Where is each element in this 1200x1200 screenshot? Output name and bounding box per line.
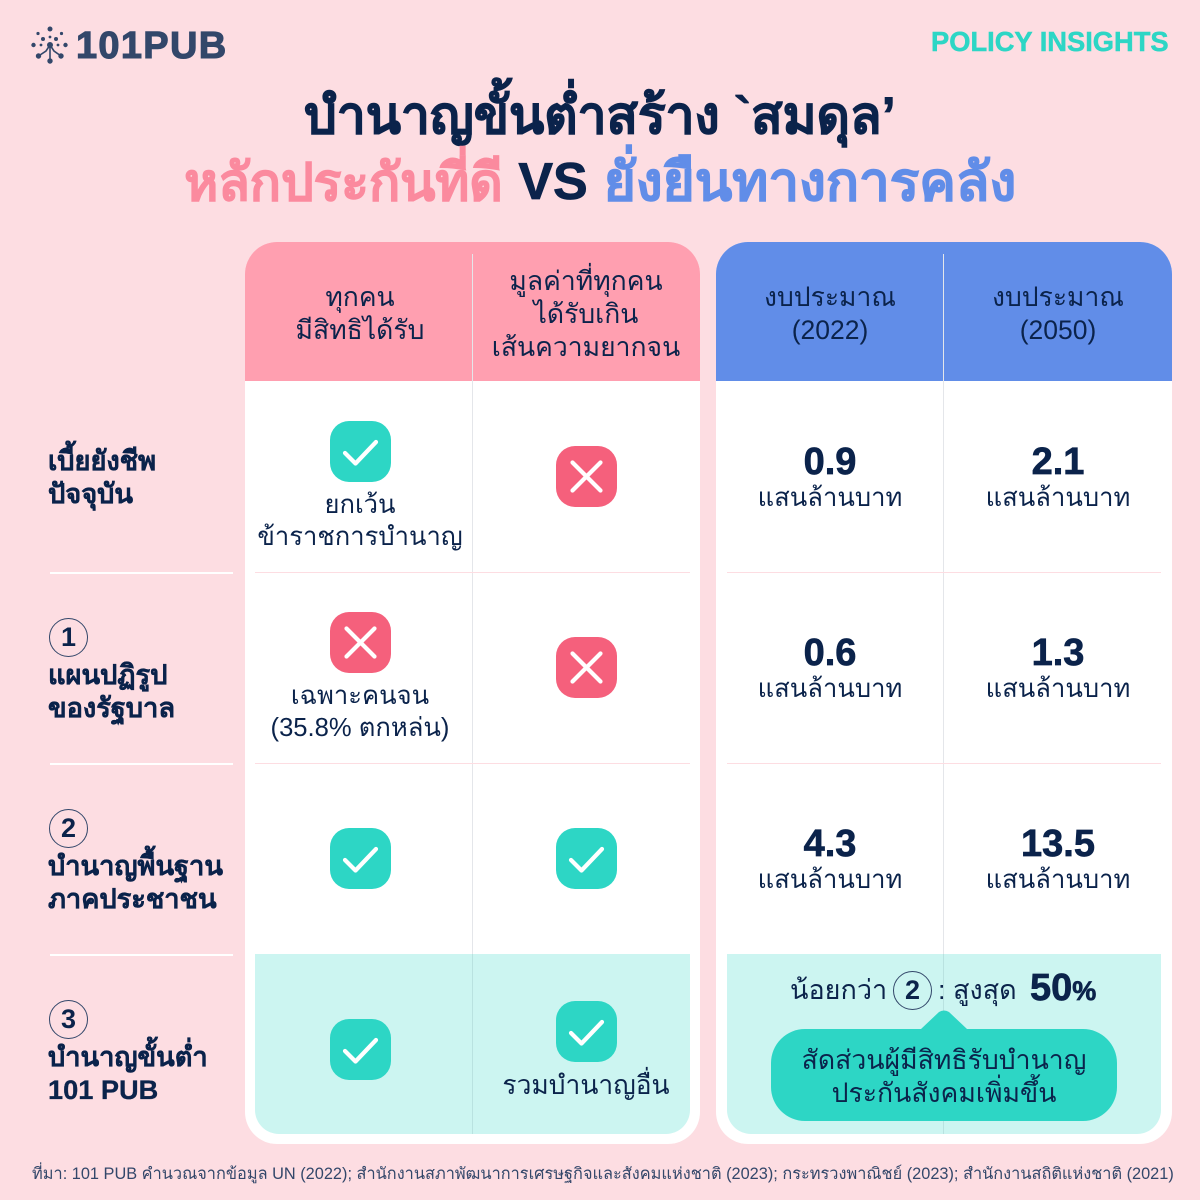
row label: 2 universal basic pension [48, 809, 223, 914]
icon: check row 2 [330, 828, 391, 889]
text: less than 2, up to 50% [790, 967, 1096, 1010]
title: VS [518, 153, 588, 211]
value: plan 1 2022: แสนล้านบาท [758, 675, 902, 703]
text: except civil servants: ข้าราชการบำนาญ [257, 523, 463, 551]
callout: share of social insurance pension recipients rises: ประกันสังคมเพิ่มขึ้น [832, 1078, 1056, 1108]
text: includes other pensions: รวมบำนาญอื่น [502, 1070, 670, 1100]
row label: 2 universal basic pension: 2 [61, 813, 76, 843]
icon: check row 0 [330, 421, 391, 482]
text: less than 2, up to 50%: 50% [1030, 967, 1096, 1009]
header: everyone eligible: มีสิทธิได้รับ [296, 315, 424, 345]
row label: 1 government plan: ของรัฐบาล [48, 692, 175, 723]
row label: 2 universal basic pension: ภาคประชาชน [48, 883, 217, 914]
header: budget 2050: (2050) [1020, 315, 1096, 345]
icon: cross row 0 [556, 446, 617, 507]
label: policy insights: POLICY INSIGHTS [931, 26, 1169, 57]
icon: cross row 1 [330, 612, 391, 673]
value: current 2050 [986, 441, 1130, 512]
value: plan 1 2022: 0.6 [804, 632, 856, 674]
callout: share of social insurance pension recipients rises [771, 1010, 1117, 1121]
value: plan 2 2022 [758, 823, 902, 894]
title: ยั่งยืนทางการคลัง [603, 153, 1016, 212]
value: plan 1 2050: 1.3 [1032, 632, 1084, 674]
text: except civil servants: ยกเว้น [324, 491, 396, 519]
value: plan 1 2022 [758, 632, 902, 703]
source note: ที่มา: 101 PUB คำนวณจากข้อมูล UN (2022); สำนักงานสภาพัฒนาการเศรษฐกิจและสังคมแห่งชาติ (2023); กระทรวงพาณิชย์ (2023); สำนักงานสถิติแห่งชาติ (2021) [32, 1165, 1174, 1183]
title: หลักประกันที่ดี [184, 153, 503, 211]
row label: current allowance: เบี้ยยังชีพ [48, 445, 156, 476]
row label: 3 minimum pension 101 PUB: 3 [61, 1004, 76, 1034]
row label: 3 minimum pension 101 PUB [48, 1000, 208, 1105]
text: poor only: (35.8% ตกหล่น) [271, 714, 449, 742]
text: except civil servants [257, 491, 463, 551]
value: current 2050: 2.1 [1032, 441, 1084, 483]
logo: 101PUB: 101PUB [76, 25, 227, 67]
row label: current allowance [48, 440, 156, 511]
value: plan 2 2050: 13.5 [1021, 823, 1095, 865]
row label: 3 minimum pension 101 PUB: บำนาญขั้นต่ำ [48, 1041, 208, 1072]
header: everyone eligible: ทุกคน [325, 282, 395, 312]
icon: check row 3 col 2 [556, 1001, 617, 1062]
text: poor only [271, 682, 449, 742]
panel: budget [716, 242, 1172, 1144]
title: บำนาญขั้นต่ำสร้าง `สมดุล’ [304, 86, 896, 144]
value: current 2022 [758, 441, 902, 512]
row label: 2 universal basic pension: บำนาญพื้นฐาน [48, 850, 223, 881]
value: current 2050: แสนล้านบาท [986, 484, 1130, 512]
header: everyone eligible [296, 282, 424, 345]
value: plan 2 2050: แสนล้านบาท [986, 866, 1130, 894]
text: poor only: เฉพาะคนจน [291, 682, 429, 710]
header: budget 2022 [764, 282, 896, 345]
header: budget 2050 [992, 282, 1124, 345]
row label: 1 government plan [48, 618, 175, 726]
text: less than 2, up to 50%: : สูงสุด [938, 975, 1017, 1005]
header: budget 2022: (2022) [792, 315, 868, 345]
icon: check row 2 col 2 [556, 828, 617, 889]
header: value above poverty line [492, 262, 680, 362]
row label: current allowance: ปัจจุบัน [48, 478, 133, 509]
panel: coverage criteria [245, 242, 700, 1144]
header: value above poverty line: มูลค่าที่ทุกคน [509, 266, 663, 296]
value: plan 1 2050: แสนล้านบาท [986, 675, 1130, 703]
row label: 1 government plan: 1 [61, 622, 76, 652]
value: plan 2 2022: 4.3 [804, 823, 856, 865]
icon: check row 3 [330, 1019, 391, 1080]
value: current 2022: แสนล้านบาท [758, 484, 902, 512]
value: plan 2 2022: แสนล้านบาท [758, 866, 902, 894]
header: budget 2050: งบประมาณ [992, 282, 1124, 312]
title [184, 77, 1016, 212]
row label: 1 government plan: แผนปฏิรูป [48, 659, 167, 690]
text: less than 2, up to 50%: 2 [905, 975, 920, 1005]
row label: 3 minimum pension 101 PUB: 101 PUB [48, 1074, 158, 1105]
value: plan 1 2050 [986, 632, 1130, 703]
header: value above poverty line: เส้นความยากจน [492, 332, 680, 362]
icon: cross row 1 col 2 [556, 637, 617, 698]
value: plan 2 2050 [986, 823, 1130, 894]
header: value above poverty line: ได้รับเกิน [534, 299, 638, 329]
text: less than 2, up to 50%: น้อยกว่า [790, 975, 887, 1005]
callout: share of social insurance pension recipients rises: สัดส่วนผู้มีสิทธิรับบำนาญ [802, 1045, 1086, 1075]
value: current 2022: 0.9 [804, 441, 856, 483]
header: budget 2022: งบประมาณ [764, 282, 896, 312]
